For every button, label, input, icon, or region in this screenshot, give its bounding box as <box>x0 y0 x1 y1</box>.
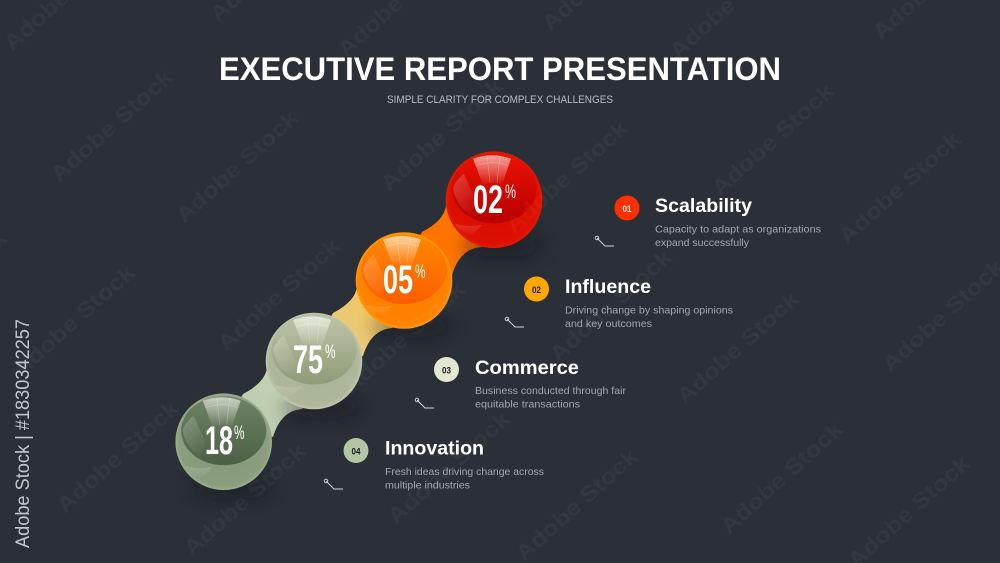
sphere: 02 percent <box>446 151 542 257</box>
item 04: Innovation <box>324 438 544 492</box>
stock watermarks: Adobe Stock <box>213 233 345 356</box>
stock watermarks: Adobe Stock <box>707 78 839 201</box>
badge 01 <box>614 196 640 220</box>
stock watermarks: Adobe Stock <box>672 286 804 409</box>
heading Innovation: Innovation <box>385 438 484 460</box>
badge 03 <box>434 357 459 382</box>
badge 04 <box>344 438 368 463</box>
stock watermarks: Adobe Stock <box>383 406 515 529</box>
badge number 02: 02 <box>532 285 541 296</box>
sphere: 18 percent <box>175 393 272 499</box>
connector mark 02 <box>505 317 524 327</box>
heading Commerce: Commerce <box>475 358 579 379</box>
connector: orange to red <box>405 205 482 275</box>
value 18: 18 <box>205 419 233 463</box>
stock watermarks: Adobe Stock <box>52 395 184 518</box>
connector mark 01 <box>595 236 614 246</box>
badge number 03: 03 <box>442 366 451 376</box>
title: EXECUTIVE REPORT PRESENTATION <box>219 51 781 87</box>
percent sign 05: % <box>415 262 426 283</box>
value 05: 05 <box>383 258 413 302</box>
sphere values <box>205 178 516 463</box>
stock watermarks: Adobe Stock <box>179 438 311 561</box>
stock watermarks: Adobe Stock <box>8 259 140 382</box>
stock watermarks: Adobe Stock <box>545 244 677 367</box>
description Scalability: expand successfully <box>655 237 750 249</box>
connector: green to tan <box>226 367 303 437</box>
stock watermarks: Adobe Stock <box>511 443 643 563</box>
stock watermarks: Adobe Stock <box>376 73 508 196</box>
item 01: Scalability <box>595 196 821 249</box>
description Commerce: equitable transactions <box>475 398 580 410</box>
connector mark 03 <box>415 398 434 408</box>
heading Influence: Influence <box>565 277 651 298</box>
percent sign 18: % <box>234 423 245 444</box>
description Innovation: multiple industries <box>385 480 470 492</box>
stock watermarks: Adobe Stock <box>171 105 303 228</box>
percent sign 75: % <box>325 342 336 363</box>
badge number 04: 04 <box>352 446 361 458</box>
value 02: 02 <box>473 178 503 222</box>
ribbon connectors <box>226 205 482 437</box>
stock watermarks: Adobe Stock <box>501 115 633 238</box>
stock watermarks: Adobe Stock <box>877 254 1000 377</box>
item 02: Influence <box>505 276 733 330</box>
description Scalability: Capacity to adapt as organizations <box>655 224 821 236</box>
stock watermarks: Adobe Stock <box>338 276 470 399</box>
heading Scalability: Scalability <box>655 196 752 217</box>
item 03: Commerce <box>415 357 627 410</box>
badge number 01: 01 <box>622 204 632 215</box>
badge 02 <box>524 276 549 302</box>
connector: tan to orange <box>316 286 393 356</box>
stock watermarks: Adobe Stock <box>716 416 848 539</box>
stock watermarks: Adobe Stock <box>834 126 966 249</box>
description Influence: Driving change by shaping opinions <box>565 304 733 316</box>
sphere: 05 percent <box>356 232 452 338</box>
connector mark 04 <box>324 479 343 489</box>
description Commerce: Business conducted through fair <box>475 385 627 397</box>
percent sign 02: % <box>505 182 516 203</box>
value 75: 75 <box>293 338 323 382</box>
stock watermarks: Adobe Stock <box>46 64 178 187</box>
description Influence: and key outcomes <box>565 318 652 330</box>
sphere: 75 percent <box>266 313 362 418</box>
description Innovation: Fresh ideas driving change across <box>385 466 544 478</box>
subtitle: SIMPLE CLARITY FOR COMPLEX CHALLENGES <box>387 94 613 106</box>
vertical stock id: Adobe Stock | #1830342257 <box>13 319 34 548</box>
